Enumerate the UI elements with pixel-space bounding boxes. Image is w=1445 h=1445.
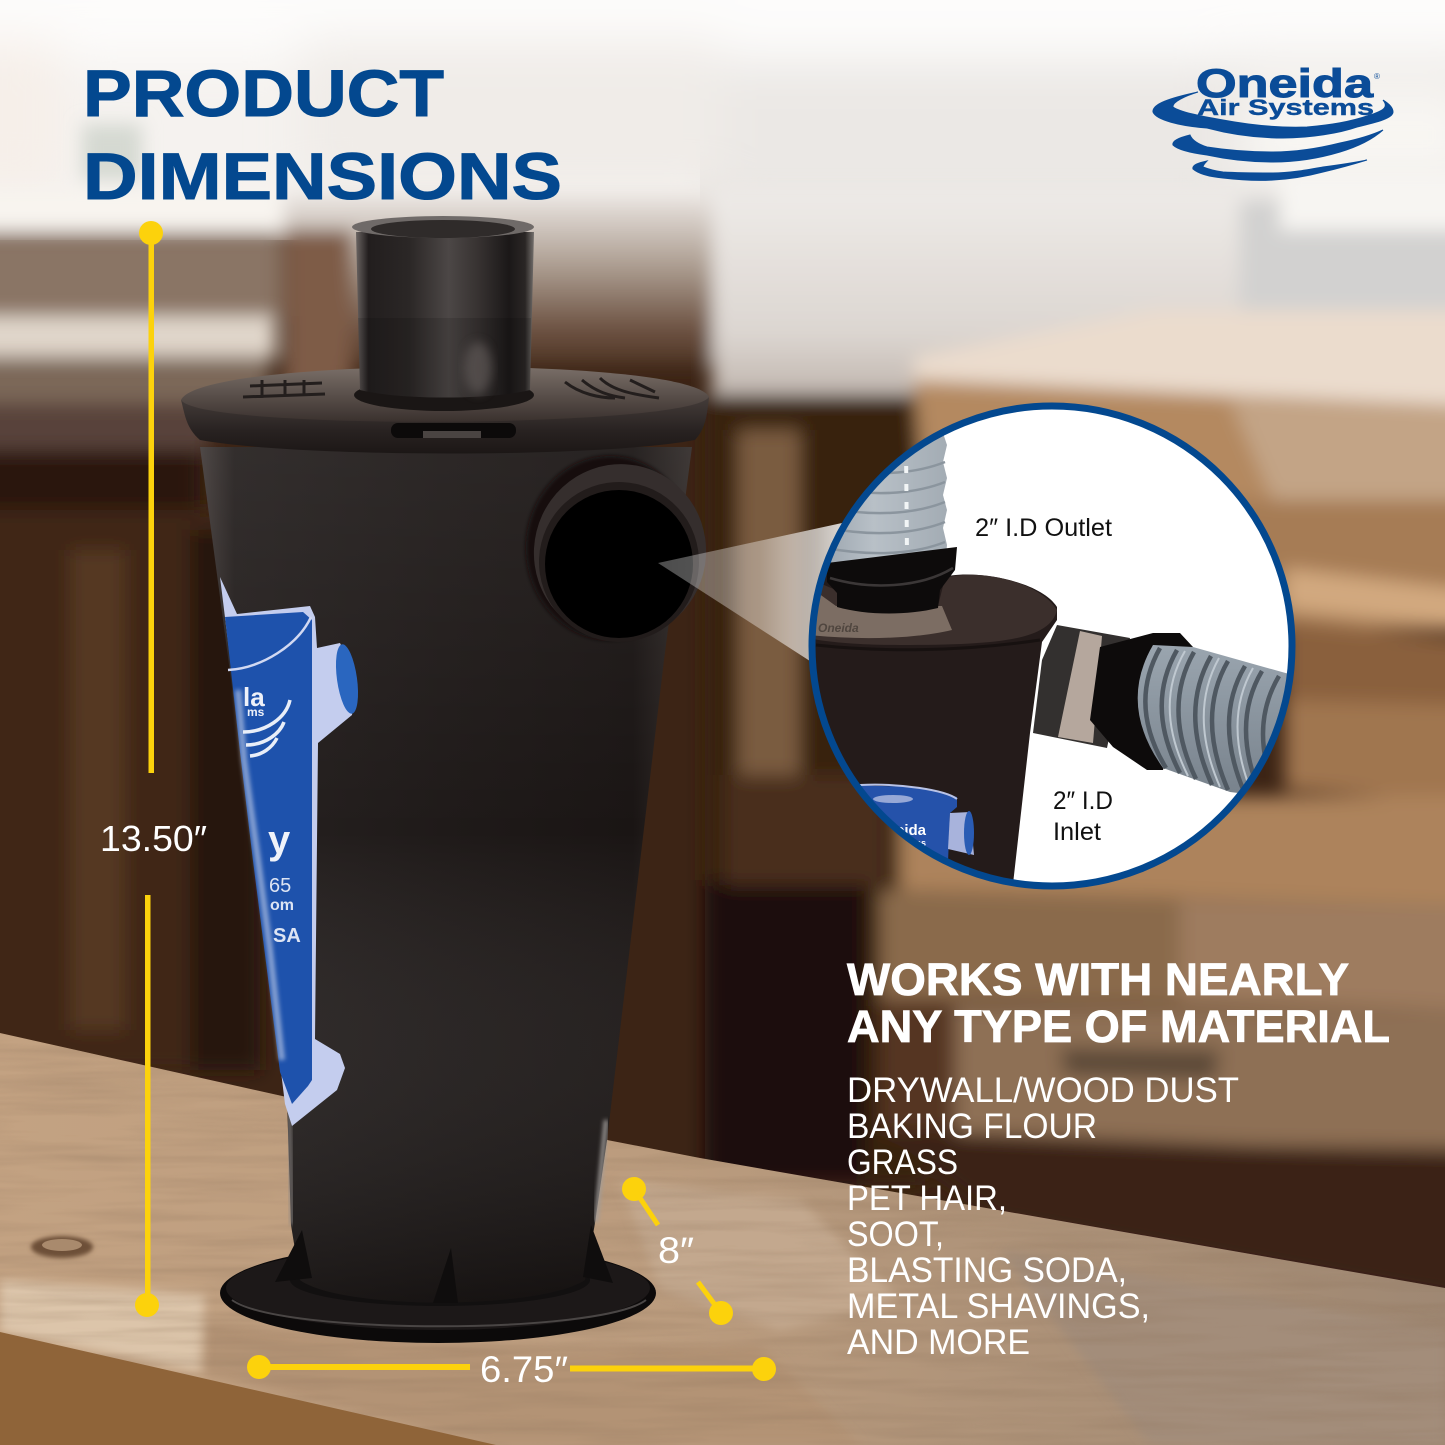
inlet label: [1053, 787, 1113, 846]
outlet hose: [830, 436, 947, 562]
table front edge: [0, 1332, 496, 1445]
lid: [181, 367, 709, 454]
materials list: GRASS: [847, 1143, 958, 1182]
width dimension line: 6.75 inches: 6.75″: [480, 1349, 568, 1390]
materials heading: [847, 954, 1390, 1052]
Oneida Air Systems logo: ®: [1374, 72, 1380, 81]
blue sticker wrapped on the side: y: [268, 818, 291, 862]
inlet label: Inlet: [1053, 818, 1101, 846]
base flange: [220, 1243, 656, 1343]
width dimension line: 6.75 inches: [247, 1349, 776, 1390]
pointer cone to inset: [658, 523, 842, 663]
materials list: DRYWALL/WOOD DUST: [847, 1071, 1239, 1110]
inset circle: hose connections: [800, 406, 1296, 890]
wood knot: [31, 1236, 93, 1258]
lid latch: [391, 423, 516, 438]
top outlet neck: [352, 216, 534, 411]
materials list: SOOT,: [847, 1215, 944, 1254]
product: cyclone dust separator: [181, 216, 725, 1343]
title: [83, 56, 562, 213]
materials heading: WORKS WITH NEARLY: [847, 954, 1349, 1005]
inset circle: hose connections: Oneida: [818, 621, 859, 635]
side inlet port: [515, 446, 725, 659]
lid embossing: [243, 378, 659, 398]
materials list: BAKING FLOUR: [847, 1107, 1097, 1146]
blue sticker wrapped on the side: SA: [273, 925, 301, 947]
depth dimension line: 8 inches: [622, 1177, 733, 1325]
inlet label: 2″ I.D: [1053, 787, 1113, 815]
blue sticker wrapped on the side: [220, 577, 362, 1126]
blue sticker wrapped on the side: ms: [247, 705, 265, 719]
title: PRODUCT: [83, 56, 444, 130]
inlet tube: [1033, 625, 1130, 748]
blue sticker in inset: ems: [908, 838, 926, 848]
title: DIMENSIONS: [83, 139, 562, 213]
Oneida Air Systems logo: [1153, 62, 1393, 180]
Oneida Air Systems logo: Oneida: [1196, 62, 1374, 106]
height dimension line: 13.50 inches: [100, 221, 207, 1317]
inlet hose: [1138, 645, 1296, 800]
foot ribs: [275, 1225, 613, 1303]
cutaway cyclone body: [800, 570, 1057, 884]
blue sticker wrapped on the side: 65: [269, 875, 291, 897]
materials heading: ANY TYPE OF MATERIAL: [847, 1001, 1390, 1052]
materials list: [847, 1071, 1239, 1362]
wooden table top: [0, 1030, 1445, 1445]
inlet rubber coupling: [1090, 633, 1193, 770]
cone body: [200, 447, 692, 1302]
materials list: PET HAIR,: [847, 1179, 1007, 1218]
height dimension line: 13.50 inches: 13.50″: [100, 818, 207, 859]
materials list: AND MORE: [847, 1323, 1030, 1362]
blue sticker wrapped on the side: om: [270, 897, 294, 914]
materials list: METAL SHAVINGS,: [847, 1287, 1150, 1326]
Oneida Air Systems logo: Air Systems: [1197, 95, 1374, 120]
blue sticker in inset: [860, 784, 974, 858]
blue sticker wrapped on the side: la: [243, 682, 265, 712]
materials list: BLASTING SODA,: [847, 1251, 1127, 1290]
outlet label: 2″ I.D Outlet: [975, 514, 1112, 542]
depth dimension line: 8 inches: 8″: [658, 1230, 694, 1271]
outlet rubber coupling: [827, 547, 957, 614]
blue sticker in inset: eida: [896, 822, 927, 839]
